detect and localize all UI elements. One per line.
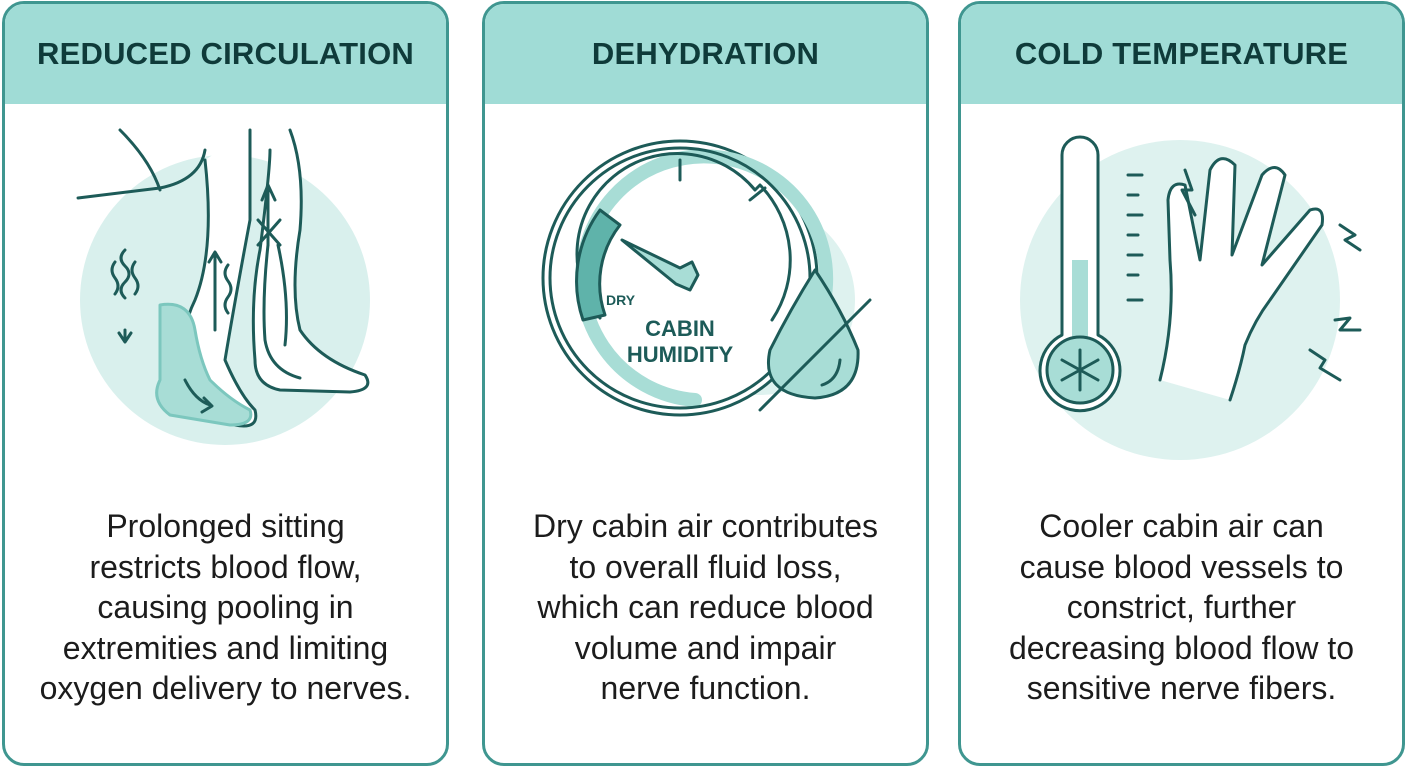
icon: thermometer and cold hand (1020, 137, 1360, 460)
text: dehydration description: to overall fluid loss, (569, 548, 842, 584)
text: cold description: sensitive nerve fibers. (1027, 670, 1336, 706)
icon: legs with blood flow (78, 130, 370, 445)
panel: dehydration (482, 1, 929, 766)
text: circulation description (40, 508, 411, 706)
icon: cabin humidity gauge (543, 141, 870, 415)
panel: reduced circulation (2, 1, 449, 766)
text: dehydration description: which can reduce blood (537, 589, 874, 625)
icon: cabin humidity gauge: HUMIDITY (627, 342, 733, 367)
text: cold description: decreasing blood flow to (1009, 630, 1354, 666)
text: dehydration description (533, 508, 878, 706)
text: cold description: Cooler cabin air can (1039, 508, 1324, 544)
icon: cabin humidity gauge: DRY (606, 292, 636, 308)
text: dehydration description: nerve function. (601, 670, 810, 706)
text: circulation description: causing pooling in (97, 589, 354, 625)
text: cold description (1009, 508, 1354, 706)
text: dehydration description: Dry cabin air contributes (533, 508, 878, 544)
heading: cold temperature (961, 4, 1402, 104)
heading: reduced circulation (5, 4, 446, 104)
heading: dehydration (485, 4, 926, 104)
heading: cold temperature: COLD TEMPERATURE (1015, 36, 1348, 71)
heading: dehydration: DEHYDRATION (592, 36, 819, 71)
text: cold description: cause blood vessels to (1020, 548, 1343, 584)
panel: cold temperature (958, 1, 1405, 766)
text: circulation description: extremities and limiting (63, 630, 388, 666)
text: circulation description: restricts blood flow, (89, 548, 362, 584)
text: circulation description: oxygen delivery to nerves. (40, 670, 411, 706)
heading: reduced circulation: REDUCED CIRCULATION (37, 36, 414, 71)
icon: cabin humidity gauge: CABIN (645, 316, 715, 341)
text: dehydration description: volume and impair (575, 630, 836, 666)
text: circulation description: Prolonged sitting (106, 508, 345, 544)
text: cold description: constrict, further (1067, 589, 1296, 625)
